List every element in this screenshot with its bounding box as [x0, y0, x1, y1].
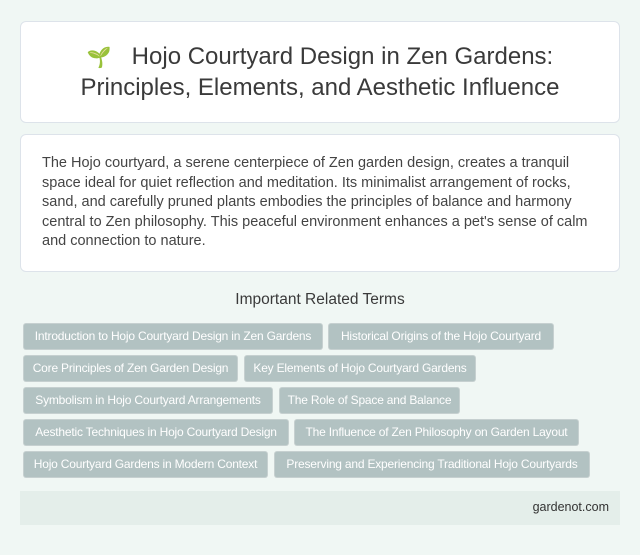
description text: central to Zen philosophy. This peaceful environment enhances a pet's sense of calm — [42, 214, 588, 230]
title: Principles, Elements, and Aesthetic Influence — [81, 74, 559, 101]
title card — [20, 21, 620, 123]
tag — [24, 324, 322, 349]
description card — [20, 134, 620, 272]
tag — [24, 452, 267, 477]
description text: and connection to nature. — [42, 233, 206, 249]
tag: Aesthetic Techniques in Hojo Courtyard Design — [35, 425, 277, 439]
tag — [295, 420, 578, 445]
tag: Introduction to Hojo Courtyard Design in Zen Gardens — [35, 329, 311, 343]
tag — [24, 420, 288, 445]
tag: Historical Origins of the Hojo Courtyard — [341, 329, 541, 343]
tag — [24, 388, 272, 413]
tag: The Influence of Zen Philosophy on Garden Layout — [306, 425, 567, 439]
tag: Preserving and Experiencing Traditional Hojo Courtyards — [286, 457, 578, 471]
description text — [42, 155, 588, 249]
tag — [275, 452, 589, 477]
description text: The Hojo courtyard, a serene centerpiece of Zen garden design, creates a tranquil — [42, 155, 569, 171]
tag — [245, 356, 475, 381]
title: 🌱 Hojo Courtyard Design in Zen Gardens: — [87, 43, 553, 70]
terms heading: Important Related Terms — [235, 291, 405, 308]
footer source: gardenot.com — [533, 500, 609, 514]
tag: Key Elements of Hojo Courtyard Gardens — [253, 361, 467, 375]
footer — [20, 491, 620, 525]
tag — [329, 324, 553, 349]
description text: space ideal for quiet reflection and meditation. Its minimalist arrangement of rocks, — [42, 174, 571, 190]
title — [81, 43, 559, 101]
tag: Hojo Courtyard Gardens in Modern Context — [34, 457, 257, 471]
tag — [280, 388, 459, 413]
tag — [24, 356, 237, 381]
tag: The Role of Space and Balance — [288, 393, 451, 407]
tag: Core Principles of Zen Garden Design — [33, 361, 228, 375]
tag: Symbolism in Hojo Courtyard Arrangements — [35, 393, 261, 407]
description text: sand, and carefully pruned plants embodies the principles of balance and harmony — [42, 194, 572, 210]
